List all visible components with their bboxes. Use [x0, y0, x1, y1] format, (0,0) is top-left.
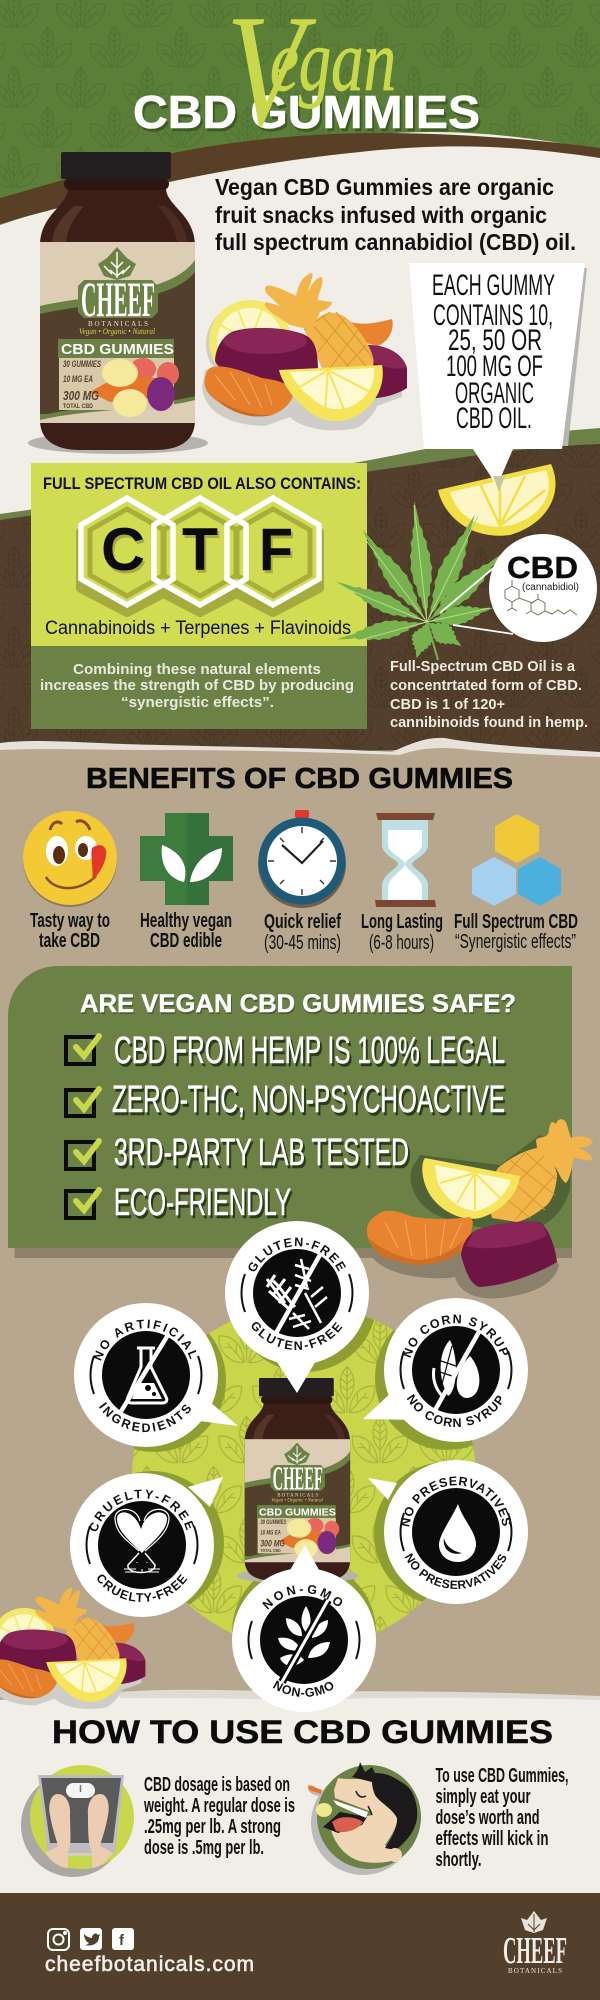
labels: benefit captions: take CBD [39, 930, 100, 952]
text: dosage instructions [143, 1774, 295, 1859]
hexagons: C T F: C [101, 516, 145, 583]
badge: no corn syrup: NO CORN SYRUP [406, 1394, 502, 1428]
text: dosage instructions: weight. A regular dose is [143, 1795, 295, 1817]
icon: man eating gummy [308, 1762, 421, 1875]
icon: facebook [112, 1928, 134, 1950]
bottle: CBD gummies jar: BOTANICALS [88, 320, 148, 328]
curved brown stripe [0, 133, 600, 224]
labels: benefit captions: (30-45 mins) [264, 932, 341, 954]
icon: stopwatch clock [258, 810, 346, 908]
checklist text: 3RD-PARTY LAB TESTED [116, 1135, 411, 1177]
hexagons: C T F: T [182, 516, 218, 583]
text: full spectrum description: cannibinoids found in hemp. [390, 714, 588, 731]
section: brown band with leaf pattern [0, 443, 600, 760]
icon: green cross with leaves [140, 813, 233, 905]
badge: no preservatives: NO PRESERVATIVES [402, 1476, 510, 1527]
text: how to eat instructions [436, 1765, 568, 1871]
text: full spectrum description: CBD is 1 of 120+ [390, 696, 505, 713]
text: full spectrum description: concentrtated form of CBD. [390, 677, 582, 694]
text: how to eat instructions: simply eat your [436, 1786, 531, 1808]
panel: are vegan CBD gummies safe [8, 966, 572, 1258]
badge: no preservatives: NO PRESERVATIVES [404, 1553, 506, 1589]
badge: no corn syrup [363, 1298, 528, 1442]
torn paper edge bottom [120, 1690, 600, 1700]
icon: smiley [23, 811, 117, 907]
badge: gluten-free: GLUTEN-FREE [252, 1322, 342, 1350]
text: how to eat instructions: shortly. [436, 1849, 482, 1871]
intro paragraph [215, 174, 576, 255]
heading: benefits of CBD gummies: BENEFITS OF CBD GUMMIES [86, 763, 513, 795]
labels: benefit captions: (6-8 hours) [369, 932, 434, 954]
badge: cruelty-free: CRUELTY-FREE [90, 1490, 194, 1532]
badge: non-GMO: NON-GMO [262, 1585, 342, 1610]
text: full spectrum description [390, 658, 588, 731]
footer website: cheefbotanicals.com [45, 1953, 254, 1976]
panel: are vegan CBD gummies safe: ARE VEGAN CBD GUMMIES SAFE? [80, 990, 516, 1018]
check marks [76, 1036, 99, 1210]
badge: non-GMO [232, 1545, 376, 1712]
bottle: central jar: 300 MG [260, 1539, 285, 1549]
illustration: gummy fruit cluster [202, 273, 407, 430]
hexagons: C T F: T [184, 519, 220, 586]
labels: benefit captions: Long Lasting [361, 911, 443, 933]
illustration: gummy fruit cluster on panel [367, 1119, 593, 1298]
callout: CBD molecule circle: (cannabidiol) [522, 582, 579, 593]
icon: hourglass [375, 813, 436, 907]
labels: benefit captions: Tasty way to [30, 910, 110, 932]
bottle: central jar: Vegan • Organic • Natural [271, 1498, 323, 1504]
caption: cannabinoids terpenes flavinoids: Cannabinoids + Terpenes + Flavinoids [45, 618, 351, 639]
bottle: CBD gummies jar: 10 MG EA [63, 374, 93, 384]
badge: no artificial ingredients: NO ARTIFICIAL [94, 1320, 196, 1361]
callout: each gummy speech bubble: 100 MG OF [446, 350, 543, 383]
icon: bathroom scale [21, 1765, 134, 1877]
text: how to eat instructions: dose’s worth and [436, 1807, 540, 1829]
icon: instagram [48, 1929, 69, 1950]
bottle: CBD gummies jar: CHEEF [81, 271, 155, 327]
torn white paper edge [0, 738, 600, 757]
badge: gluten-free: GLUTEN-FREE [248, 1238, 346, 1272]
bottle: CBD gummies jar: Vegan • Organic • Natural [79, 327, 156, 336]
bottle: central jar: BOTANICALS [277, 1493, 318, 1498]
badge: cruelty-free [70, 1473, 223, 1617]
labels: benefit captions: Healthy vegan [140, 910, 232, 932]
footer logo [503, 1911, 567, 1975]
intro paragraph: full spectrum cannabidiol (CBD) oil. [215, 229, 576, 255]
bottle: central jar: 10 MG EA [260, 1529, 281, 1536]
checklist text: 3RD-PARTY LAB TESTED [114, 1132, 409, 1174]
hexagons: C T F: F [259, 516, 293, 583]
badge: no artificial ingredients: INGREDIENTS [99, 1402, 191, 1432]
bottle: CBD gummies jar [28, 152, 208, 454]
badge shadows on lime circle [132, 1316, 473, 1634]
title: Vegan CBD Gummies [133, 0, 482, 159]
panel: full spectrum CTF [31, 463, 367, 646]
callout: each gummy speech bubble: 25, 50 OR [448, 324, 542, 357]
illustration: hemp leaf [332, 500, 512, 662]
callout: CBD molecule circle: CBD [507, 550, 578, 585]
badge: no corn syrup: NO CORN SYRUP [404, 1314, 508, 1358]
bottle: CBD gummies jar: 300 MG [63, 388, 99, 403]
bottle: central jar [237, 1378, 359, 1583]
text: dosage instructions: .25mg per lb. A strong [144, 1816, 281, 1838]
olive stripe on brown band [0, 428, 600, 520]
panel: synergistic text [31, 646, 367, 729]
title line: CBD GUMMIES: CBD GUMMIES [133, 86, 480, 138]
badge: no preservatives [368, 1460, 528, 1604]
callout: each gummy speech bubble: ORGANIC [455, 377, 534, 410]
badge: non-GMO: NON-GMO [272, 1680, 334, 1697]
badge: gluten-free [225, 1221, 369, 1393]
panel: synergistic text: increases the strength of CBD by producing [40, 677, 354, 694]
labels: benefit captions [30, 910, 578, 954]
heading: also contains: FULL SPECTRUM CBD OIL ALSO CONTAINS: [43, 475, 361, 493]
section: lower paper background [0, 1690, 600, 1893]
kraft texture [0, 758, 600, 1693]
checkboxes [66, 1037, 94, 1218]
labels: benefit captions: Quick relief [264, 911, 341, 933]
icon: three hexagons [472, 814, 561, 906]
panel: synergistic text: Combining these natural elements [73, 661, 321, 678]
checklist text [112, 1030, 507, 1227]
footer logo: BOTANICALS [508, 1967, 562, 1975]
callout: CBD molecule circle [440, 534, 597, 642]
intro paragraph: Vegan CBD Gummies are organic [215, 174, 554, 200]
section: kraft paper background [0, 741, 600, 1700]
badge: cruelty-free: CRUELTY-FREE [97, 1574, 188, 1602]
title script: egan: egan [270, 13, 396, 110]
bottle: CBD gummies jar: 30 GUMMIES [63, 359, 101, 369]
text: dosage instructions: CBD dosage is based on [144, 1774, 290, 1796]
lemon wedge [438, 464, 556, 536]
illustration: gummy fruit cluster left [0, 1587, 145, 1709]
text: dosage instructions: dose is .5mg per lb. [144, 1837, 264, 1859]
intro paragraph: fruit snacks infused with organic [215, 202, 547, 228]
hexagons: C T F [81, 498, 319, 612]
text: full spectrum description: Full-Spectrum CBD Oil is a [390, 658, 576, 675]
section: green header with leaf pattern [0, 0, 600, 225]
badge: no artificial ingredients [74, 1303, 238, 1447]
hexagons: C T F: C [103, 519, 147, 586]
bottle: CBD gummies jar: TOTAL CBD [63, 404, 94, 410]
bottle: central jar: CHEEF [273, 1460, 323, 1497]
panel: synergistic text: “synergistic effects”. [121, 694, 274, 711]
heading: how to use CBD gummies: HOW TO USE CBD GUMMIES [52, 1714, 553, 1750]
footer band [0, 1893, 600, 2000]
bottle: central jar: CBD GUMMIES [259, 1507, 336, 1518]
callout: each gummy speech bubble [409, 263, 587, 492]
hexagons: C T F: F [261, 519, 295, 586]
checklist text: ECO-FRIENDLY [116, 1185, 293, 1227]
title line: CBD GUMMIES shadow: CBD GUMMIES [135, 89, 482, 141]
bottle: CBD gummies jar: CBD GUMMIES [61, 341, 174, 358]
icon: facebook: f [119, 1932, 125, 1949]
checklist text: ECO-FRIENDLY [114, 1182, 291, 1224]
labels: benefit captions: CBD edible [150, 930, 222, 952]
callout: each gummy speech bubble: CBD OIL. [456, 402, 532, 435]
bottle: central jar: TOTAL CBD [260, 1548, 281, 1553]
background: lime leaf circle [132, 1305, 476, 1649]
heading: safe question: ARE VEGAN CBD GUMMIES SAFE? [81, 992, 517, 1020]
bottle: central jar: 30 GUMMIES [260, 1519, 287, 1526]
icon: twitter [80, 1928, 102, 1950]
